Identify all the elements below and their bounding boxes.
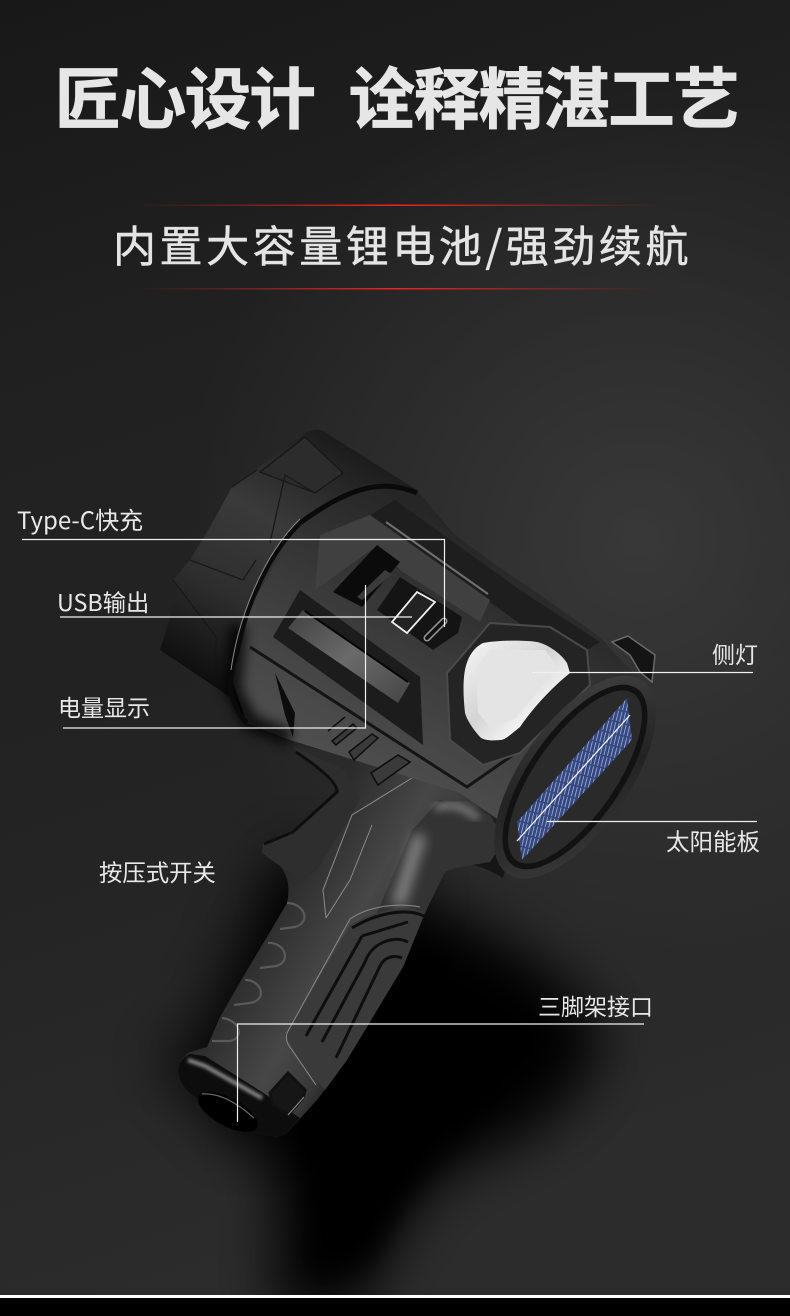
red divider top — [136, 204, 660, 206]
long side window — [288, 610, 410, 703]
finger ridges — [212, 903, 304, 1041]
long side frame — [273, 590, 423, 745]
red divider bottom — [136, 288, 660, 290]
battery window — [333, 545, 400, 607]
body fin — [275, 673, 295, 737]
side light frame — [447, 623, 590, 765]
flashlight — [160, 430, 687, 1140]
hook loop — [612, 636, 655, 682]
front ring inner rim — [475, 662, 675, 892]
shroud top fin — [260, 437, 343, 493]
callout: tripod mount — [238, 988, 653, 1122]
lanyard hole — [270, 1073, 305, 1115]
solar panel — [508, 690, 642, 864]
USB port — [392, 592, 435, 633]
callout: battery display — [58, 585, 366, 728]
port plate — [377, 577, 462, 650]
neck highlight — [398, 835, 420, 905]
bottom band — [0, 1295, 790, 1316]
grip side panel — [285, 909, 425, 1090]
base highlight — [188, 1060, 262, 1098]
cast shadow — [160, 850, 598, 1310]
head shroud — [160, 430, 417, 723]
neck top highlight — [435, 806, 478, 818]
socket highlight — [202, 1094, 254, 1118]
side light inner facet — [476, 650, 558, 728]
grip groove lines — [306, 912, 424, 1058]
upper facet — [315, 515, 490, 622]
switch stripes — [328, 717, 410, 785]
trigger guard shade — [264, 752, 337, 844]
callout: USB output: USB输出 — [57, 584, 149, 618]
shroud fin lines — [173, 470, 315, 665]
battery level steps — [357, 570, 392, 600]
body — [232, 483, 640, 860]
callout: side light: 侧灯 — [712, 636, 758, 670]
label: press switch: 按压式开关 — [99, 854, 216, 888]
body seam — [250, 647, 520, 787]
handle and grip — [178, 747, 520, 1140]
callout: solar panel: 太阳能板 — [666, 823, 760, 857]
lanyard hole rim — [288, 1097, 304, 1115]
callout: tripod mount: 三脚架接口 — [538, 988, 653, 1022]
callout: Type-C: Type-C快充 — [17, 501, 143, 536]
trigger guard panel — [262, 747, 360, 880]
handle neck — [372, 800, 505, 925]
title: 匠心设计 — [55, 47, 314, 143]
front ring — [463, 649, 687, 905]
title second part: 诠释精湛工艺 — [349, 47, 738, 143]
grip base — [178, 1054, 300, 1136]
top rail highlight — [386, 522, 488, 594]
callout: battery display: 电量显示 — [58, 689, 150, 723]
grip highlight lines — [286, 778, 420, 1085]
Type-C port — [427, 621, 444, 638]
collar ring — [230, 486, 417, 723]
collar shade — [233, 625, 290, 738]
side light lens — [464, 641, 570, 740]
long window slit — [305, 611, 408, 682]
top rail — [367, 500, 600, 660]
subtitle: 内置大容量锂电池/强劲续航 — [113, 213, 692, 275]
tripod socket — [192, 1084, 264, 1140]
collar highlight — [231, 519, 300, 670]
callout: Type-C — [17, 501, 444, 627]
Type-C port slot — [427, 621, 444, 638]
